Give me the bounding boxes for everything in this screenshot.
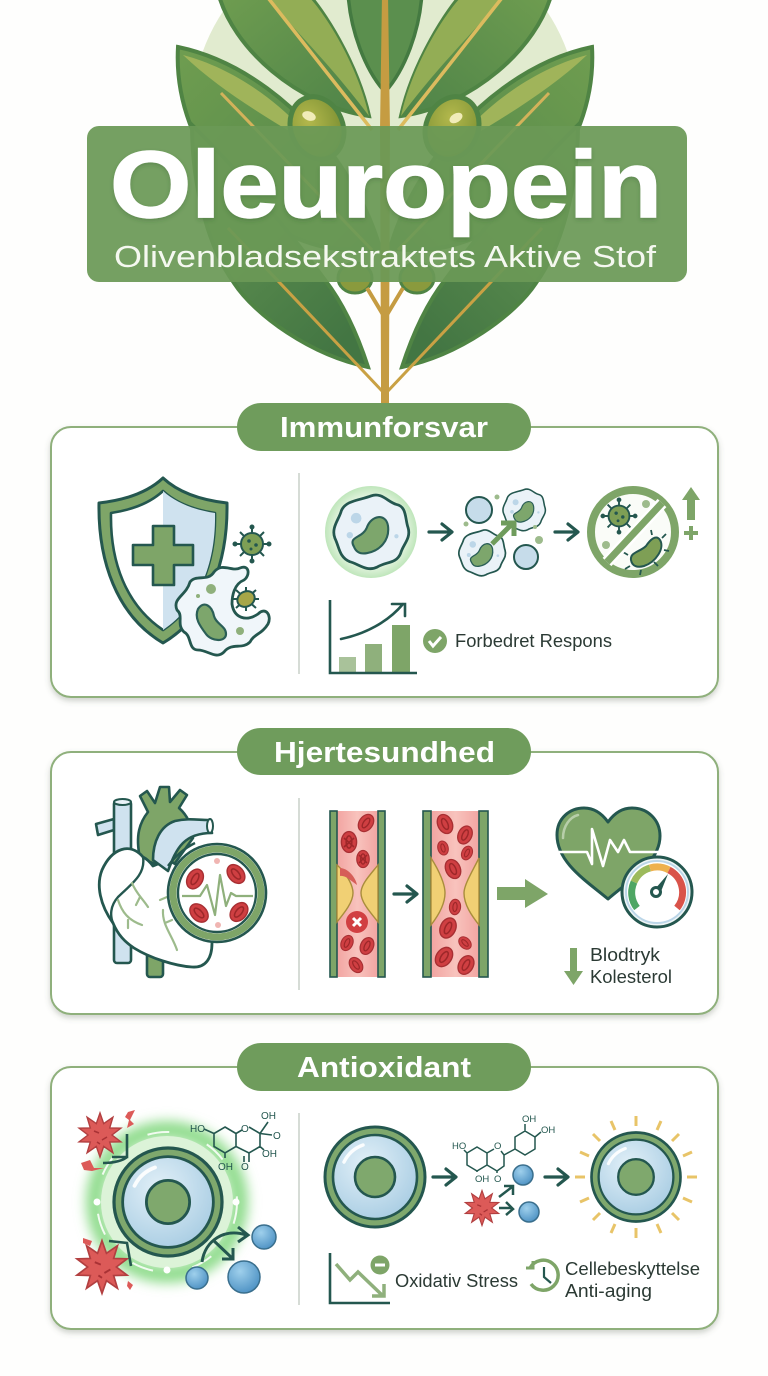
molecule with radical neutralising: HO xyxy=(452,1141,466,1152)
label: Oxidativ Stress xyxy=(395,1271,518,1291)
icon: heart with lens xyxy=(96,787,266,977)
artery: cleared xyxy=(423,811,488,977)
arrow xyxy=(394,886,417,902)
heading pill xyxy=(237,403,531,451)
step: immune cell with halo xyxy=(325,486,417,578)
cell: before xyxy=(325,1127,425,1227)
icon: shield xyxy=(99,478,227,643)
heading pill: Antioxidant xyxy=(297,1052,471,1084)
heading pill: Hjertesundhed xyxy=(274,737,495,769)
arrow xyxy=(433,1169,456,1185)
molecule: O xyxy=(241,1162,249,1173)
step: activated cells xyxy=(459,489,545,576)
arrow xyxy=(555,524,578,540)
molecule with radical neutralising: O xyxy=(494,1141,501,1152)
molecule with radical neutralising xyxy=(452,1114,555,1226)
icon: up arrow and plus xyxy=(682,487,700,540)
molecule: O xyxy=(241,1124,249,1135)
molecule with radical neutralising: OH xyxy=(541,1125,555,1136)
stem xyxy=(380,0,390,405)
free radicals xyxy=(77,1110,135,1293)
icon: down arrow xyxy=(564,948,583,985)
pale green halo xyxy=(191,0,579,312)
subtitle: Olivenbladsekstraktets Aktive Stof xyxy=(114,239,656,274)
molecule: HO xyxy=(190,1124,205,1135)
molecule with radical neutralising: O xyxy=(494,1174,501,1185)
upper olives xyxy=(281,89,488,167)
label: Forbedret Respons xyxy=(455,631,612,651)
artery: narrowed xyxy=(330,811,385,977)
title banner xyxy=(87,126,687,282)
chart: falling stress xyxy=(330,1253,390,1303)
centre top leaf xyxy=(348,0,422,92)
molecule xyxy=(190,1111,281,1173)
icon: check xyxy=(423,629,447,653)
panel: Hjertesundhed xyxy=(51,728,718,1014)
label: Blodtryk xyxy=(590,945,661,965)
icon: blocked pathogens xyxy=(591,490,675,575)
bar chart xyxy=(330,600,417,673)
icon: heart with pulse xyxy=(557,808,660,899)
neutralised radicals xyxy=(186,1225,276,1293)
icon: macrophage xyxy=(176,567,269,655)
large arrow xyxy=(497,879,548,908)
label: Anti-aging xyxy=(565,1281,652,1301)
icon: gauge xyxy=(622,857,692,927)
title: Oleuropein xyxy=(110,132,662,238)
panel: Immunforsvar xyxy=(51,403,718,697)
arrow xyxy=(545,1169,568,1185)
molecule: O xyxy=(273,1131,281,1142)
lower olives xyxy=(338,263,434,293)
molecule: OH xyxy=(262,1149,277,1160)
molecule with radical neutralising: OH xyxy=(522,1114,536,1125)
cell: radiant xyxy=(575,1116,697,1238)
heading pill xyxy=(237,728,531,775)
icon: virus xyxy=(234,526,270,562)
label: Cellebeskyttelse xyxy=(565,1259,700,1279)
header illustration: olive branch xyxy=(0,0,768,412)
protected cell with glow xyxy=(94,1130,240,1274)
molecule with radical neutralising: OH xyxy=(475,1174,489,1185)
molecule: OH xyxy=(218,1162,233,1173)
label: Kolesterol xyxy=(590,967,672,987)
icon: clock xyxy=(526,1260,558,1290)
heading pill: Immunforsvar xyxy=(280,412,488,444)
molecule: OH xyxy=(261,1111,276,1122)
panel: Antioxidant xyxy=(51,1043,718,1329)
heading pill xyxy=(237,1043,531,1091)
arrow xyxy=(429,524,452,540)
